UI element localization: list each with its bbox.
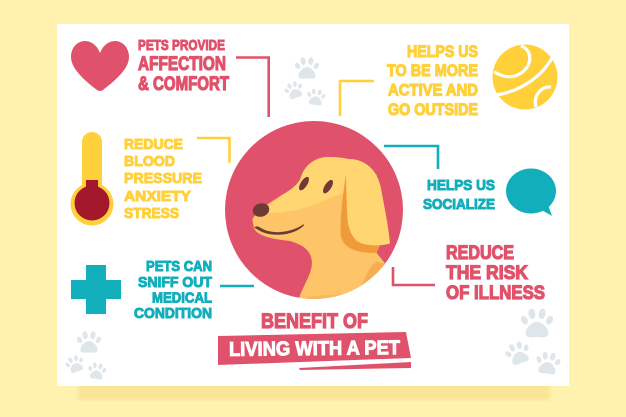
icon: tennis ball: [492, 44, 558, 110]
text: helps us socialize: HELPS US: [427, 177, 495, 194]
paw prints: bottom left: [63, 331, 108, 380]
mouth: [255, 225, 304, 234]
connector: socialize: [384, 146, 438, 169]
text: reduce blood pressure anxiety stress: STRESS: [124, 205, 179, 222]
icon: thermometer: [70, 132, 114, 226]
text: reduce the risk of illness: REDUCE: [446, 243, 514, 264]
icon: speech bubble: [506, 168, 556, 216]
text: reduce the risk of illness: THE RISK: [446, 263, 528, 284]
paw prints: top: [282, 57, 327, 106]
neck shading: [361, 262, 385, 286]
dog head highlight: [265, 157, 352, 213]
text: pets can sniff out medical condition: CONDITION: [134, 305, 212, 322]
ear: [346, 159, 390, 245]
connector: affection: [236, 58, 269, 117]
text: reduce blood pressure anxiety stress: REDUCE: [124, 136, 183, 153]
connector: blood pressure: [197, 138, 230, 163]
text: pets can sniff out medical condition: MEDICAL: [152, 290, 212, 306]
connector: active: [340, 81, 374, 116]
illustration: dog in circle: [225, 121, 403, 305]
text: helps us to be more active and go outside: GO OUTSIDE: [388, 100, 478, 119]
text: helps us to be more active and go outside: [387, 42, 478, 119]
white card: [57, 24, 569, 386]
ear shadow: [341, 170, 381, 253]
banner: [218, 332, 411, 365]
connector: illness: [393, 267, 435, 285]
icon: heart: [71, 41, 129, 91]
text: reduce blood pressure anxiety stress: PRESSURE: [124, 170, 202, 187]
text: helps us socialize: [423, 177, 495, 213]
text: reduce blood pressure anxiety stress: ANXIETY: [124, 188, 191, 205]
text: reduce blood pressure anxiety stress: BLOOD: [124, 153, 175, 170]
text: pets provide affection and comfort: AFFECTION: [138, 54, 226, 75]
text: pets provide affection and comfort: [138, 37, 229, 95]
card shadow: [78, 372, 550, 400]
text: pets provide affection and comfort: PETS PROVIDE: [138, 37, 225, 54]
text: reduce the risk of illness: OF ILLNESS: [446, 283, 545, 304]
connector: medical: [220, 285, 254, 287]
infographic: [57, 24, 569, 400]
heading: benefit of: BENEFIT OF: [261, 310, 368, 333]
text: helps us to be more active and go outside: TO BE MORE: [387, 61, 478, 80]
text: pets provide affection and comfort: & COMFORT: [138, 74, 229, 95]
text: helps us to be more active and go outside: HELPS US: [407, 42, 478, 61]
dog body and head: [252, 157, 387, 302]
nose: [252, 203, 270, 217]
text: helps us to be more active and go outside: ACTIVE AND: [388, 80, 478, 100]
text: helps us socialize: SOCIALIZE: [423, 196, 495, 213]
heading: living with a pet: LIVING WITH A PET: [229, 337, 400, 361]
text: pets can sniff out medical condition: [134, 258, 212, 322]
banner underline: [299, 362, 411, 370]
paw prints: bottom right: [502, 308, 563, 375]
icon: cross: [71, 265, 121, 314]
text: reduce blood pressure anxiety stress: [124, 136, 202, 222]
text: reduce the risk of illness: [446, 243, 545, 304]
eyes: [299, 176, 309, 190]
text: pets can sniff out medical condition: PETS CAN: [146, 258, 212, 275]
text: pets can sniff out medical condition: SNIFF OUT: [138, 274, 212, 291]
